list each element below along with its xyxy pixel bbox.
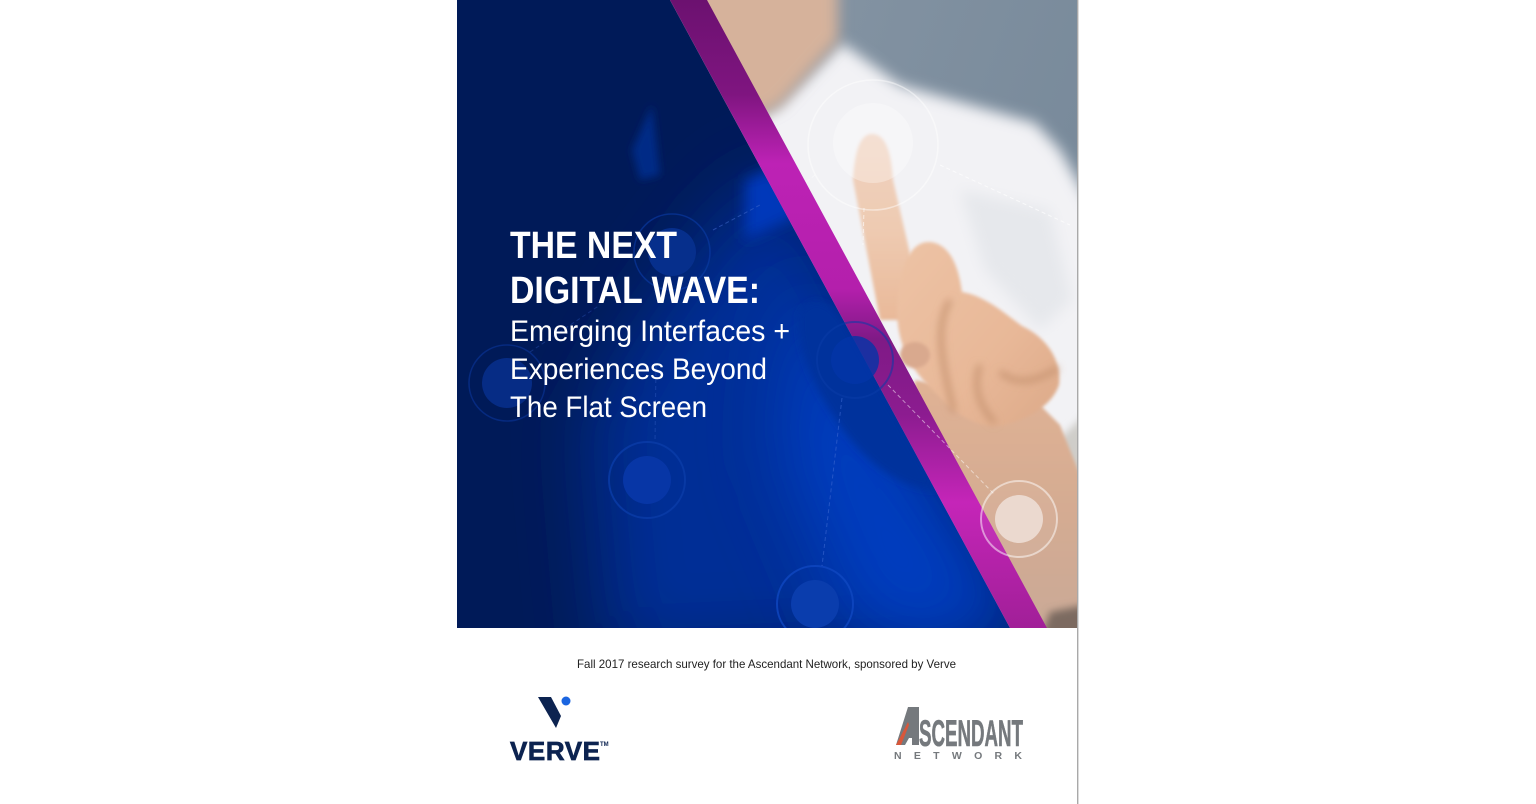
subtitle: Experiences Beyond <box>510 353 767 386</box>
logo: Verve <box>510 696 609 766</box>
logo: Ascendant Network: SCENDANT <box>919 713 1023 754</box>
logo: Ascendant Network: NETWORK <box>894 750 1022 762</box>
diagonal purple band <box>670 0 1047 628</box>
title: THE NEXT <box>510 225 677 267</box>
blue shirt shape <box>590 170 1030 660</box>
subtitle: Emerging Interfaces + <box>510 315 790 348</box>
touch ring: far left <box>469 345 545 421</box>
photo: hand pointing on shirt <box>707 0 1077 628</box>
fist <box>897 242 1059 426</box>
wrist and arm <box>913 378 1077 628</box>
finger shadows <box>941 300 1058 423</box>
touch ring: finger tip <box>852 80 922 211</box>
logo: Verve: TM <box>600 742 609 748</box>
hand shadow <box>804 334 934 487</box>
logo: Ascendant Network <box>894 707 1023 762</box>
shirt <box>766 38 1077 439</box>
subtitle: The Flat Screen <box>510 391 707 424</box>
logo: Verve: VERVE <box>510 736 600 766</box>
collar highlight <box>632 105 660 180</box>
touch ring: center <box>831 321 894 390</box>
shirt shadow folds <box>969 198 1066 320</box>
subtitle <box>510 315 790 424</box>
finger <box>853 134 912 320</box>
page edge line <box>1077 0 1078 804</box>
neck <box>707 0 846 118</box>
blue overlay panel <box>457 0 1030 660</box>
touch ring: bottom <box>776 565 854 628</box>
survey caption: Fall 2017 research survey for the Ascendant Network, sponsored by Verve <box>577 657 956 671</box>
touch ring: wrist <box>981 481 1057 557</box>
title <box>510 225 760 312</box>
thumbnail <box>900 342 930 368</box>
cover page <box>457 0 1078 804</box>
touch ring: lower left <box>609 442 685 518</box>
cover image panel <box>457 0 1100 660</box>
dashed connector lines <box>530 165 1070 566</box>
shoulder highlight <box>745 168 800 240</box>
touch ring: upper <box>634 214 710 290</box>
title: DIGITAL WAVE: <box>510 270 760 312</box>
